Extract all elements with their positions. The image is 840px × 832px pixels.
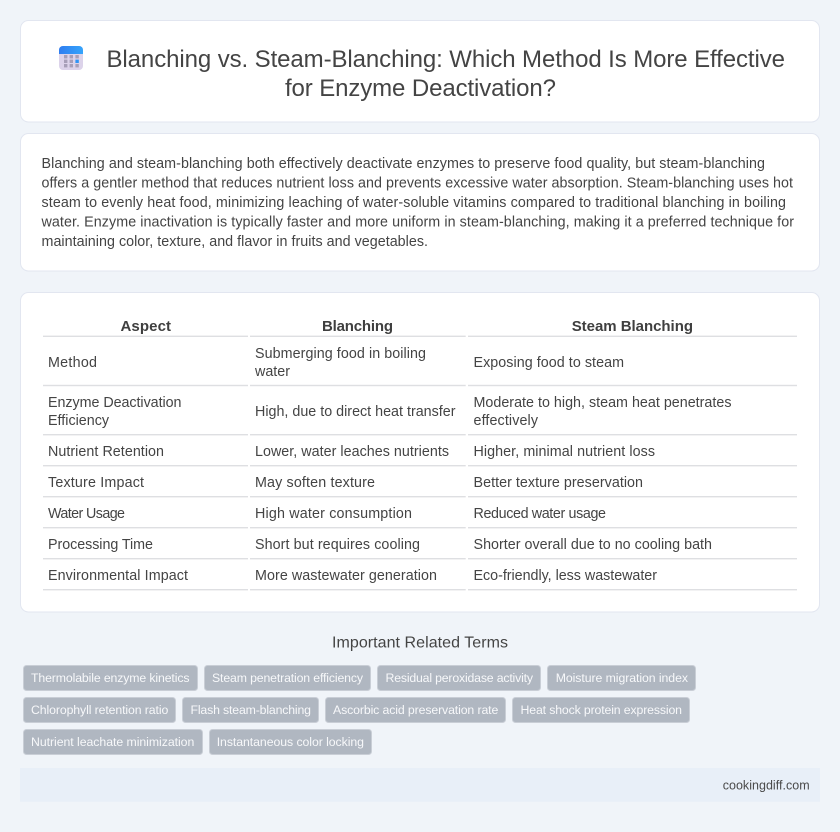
related term tags: Steam penetration efficiency <box>212 671 364 685</box>
related term tags: Residual peroxidase activity <box>386 671 534 685</box>
row: environmental impact: Environmental Impact <box>48 568 188 584</box>
row: enzyme deactivation efficiency <box>43 395 797 435</box>
row: method: water <box>254 364 290 380</box>
row: enzyme deactivation efficiency: Enzyme Deactivation <box>48 395 182 411</box>
row: nutrient retention: Lower, water leaches nutrients <box>255 444 449 460</box>
row: enzyme deactivation efficiency: Moderate to high, steam heat penetrates <box>474 395 732 411</box>
row: processing time <box>43 537 797 559</box>
summary text: water. Enzyme inactivation is typically faster and more uniform in steam-blanching, making it a preferred technique for <box>40 214 794 230</box>
row: method <box>43 346 797 386</box>
row: method: Submerging food in boiling <box>255 346 426 362</box>
row: method: Exposing food to steam <box>474 355 624 371</box>
row: nutrient retention: Higher, minimal nutrient loss <box>474 444 655 460</box>
row: processing time: Short but requires cooling <box>255 537 420 553</box>
table header row: Steam Blanching <box>572 318 693 335</box>
row: environmental impact <box>43 568 797 590</box>
related term tags: Ascorbic acid preservation rate <box>333 703 498 717</box>
row: nutrient retention <box>43 444 797 466</box>
related term tags: Heat shock protein expression <box>520 703 682 717</box>
panel: comparison table <box>20 292 820 612</box>
related term tags: Nutrient leachate minimization <box>31 735 194 749</box>
summary text: Blanching and steam-blanching both effectively deactivate enzymes to preserve food quality, but steam-blanching <box>42 156 765 172</box>
row: water usage <box>43 506 797 528</box>
row: method: Method <box>48 355 97 371</box>
row: water usage: Water Usage <box>48 506 125 522</box>
summary text: maintaining color, texture, and flavor in fruits and vegetables. <box>42 234 428 250</box>
related term tags: Moisture migration index <box>556 671 689 685</box>
footer bar <box>20 768 820 802</box>
row: texture impact: May soften texture <box>255 475 375 491</box>
row: water usage: High water consumption <box>255 506 412 522</box>
row: texture impact: Texture Impact <box>48 475 144 491</box>
row: environmental impact: More wastewater generation <box>255 568 437 584</box>
row: enzyme deactivation efficiency: High, due to direct heat transfer <box>255 404 456 420</box>
row: processing time: Processing Time <box>48 537 153 553</box>
table header row: Aspect <box>120 318 171 335</box>
heading: important related terms: Important Related Terms <box>332 634 508 652</box>
title: for Enzyme Deactivation? <box>285 75 556 102</box>
related term tags: Instantaneous color locking <box>217 735 364 749</box>
summary text: steam to evenly heat food, minimizing leaching of water-soluble vitamins compared to traditional blanching in boiling <box>42 195 786 211</box>
row: texture impact: Better texture preservation <box>474 475 643 491</box>
footer bar: cookingdiff.com <box>723 778 810 792</box>
row: texture impact <box>43 475 797 497</box>
row: enzyme deactivation efficiency: effectively <box>474 413 539 429</box>
title: Blanching vs. Steam-Blanching: Which Method Is More Effective <box>106 46 785 73</box>
row: environmental impact: Eco-friendly, less wastewater <box>474 568 657 584</box>
panel: title header <box>20 20 820 122</box>
related term tags: Thermolabile enzyme kinetics <box>31 671 190 685</box>
summary text: offers a gentler method that reduces nutrient loss and prevents excessive water absorption. Steam-blanching uses hot <box>42 176 793 192</box>
related term tags <box>24 666 696 754</box>
row: enzyme deactivation efficiency: Efficiency <box>48 413 110 429</box>
row: processing time: Shorter overall due to no cooling bath <box>474 537 712 553</box>
related term tags: Chlorophyll retention ratio <box>31 703 168 717</box>
table header row <box>43 318 797 337</box>
summary text <box>40 156 794 250</box>
icon: calendar <box>59 46 83 70</box>
row: water usage: Reduced water usage <box>474 506 606 522</box>
row: nutrient retention: Nutrient Retention <box>48 444 164 460</box>
title <box>106 46 785 102</box>
panel: summary paragraph <box>20 134 820 271</box>
related term tags: Flash steam-blanching <box>190 703 311 717</box>
table header row: Blanching <box>322 318 393 335</box>
